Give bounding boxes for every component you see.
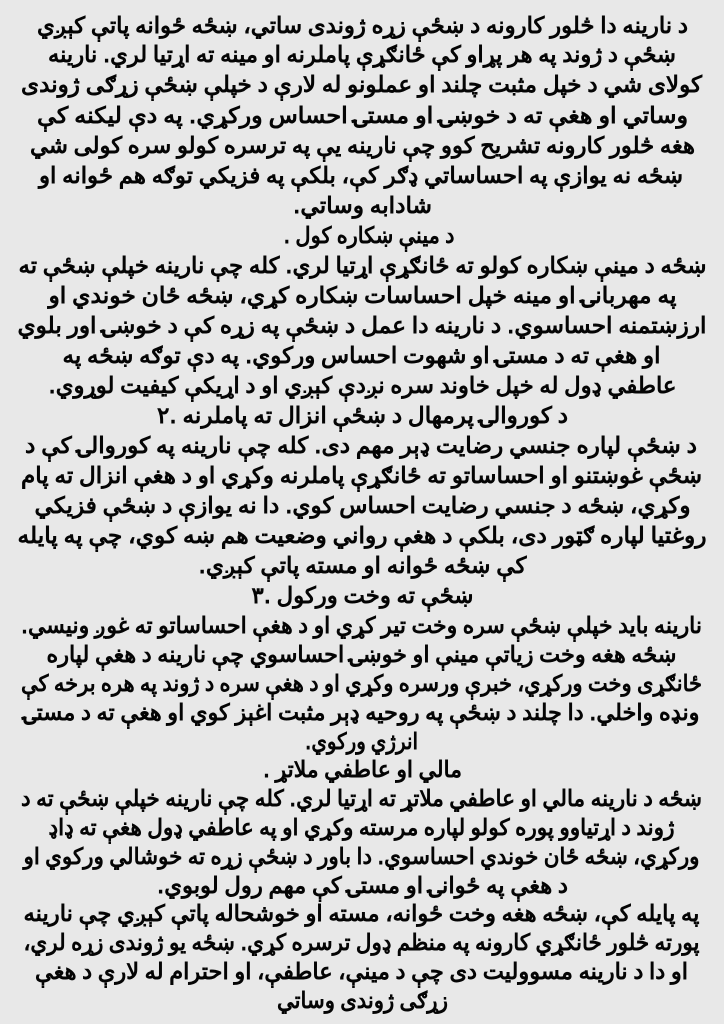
- text block: showing love: [18, 253, 706, 402]
- text block: introduction: کولای شي د خپل مثبت چلند او عملونو له لارې د خپلې ښځې زړګی ژوندی: [21, 72, 702, 101]
- text block: introduction: د نارینه دا څلور کارونه د ښځې زړه ژوندی ساتي، ښځه ځوانه پاتې کېږي: [37, 13, 688, 42]
- text block: showing love: او هغې ته د مستۍ او شهوت احساس ورکوي. په دې توګه ښځه په: [62, 343, 660, 372]
- text block: section 2: د ښځې لپاره جنسي رضایت ډېر مهم دی. کله چې نارینه په کوروالۍ کې د: [25, 433, 697, 462]
- text block: financial and emotional support: ژوند د اړتیاوو پوره کولو لپاره مرسته وکړي او په عاطفي ډول هغې ته ډاډ: [48, 815, 674, 844]
- text block: introduction: ښځې د ژوند په هر پړاو کې ځانګړې پاملرنه او مینه ته اړتیا لري. نارینه: [48, 42, 676, 71]
- text block: showing love: ارزښتمنه احساسوي. د نارینه دا عمل د ښځې په زړه کې د خوښۍ اور بلوي: [18, 313, 706, 342]
- text block: introduction: وساتي او هغې ته د خوښۍ او مستۍ احساس ورکړي. په دې لیکنه کې: [37, 103, 688, 132]
- text block: financial and emotional support: [21, 786, 702, 902]
- text block: showing love: عاطفي ډول له خپل خاوند سره نږدې کېږي او د اړیکې کیفیت لوړوي.: [48, 373, 677, 402]
- heading: section 2: د کوروالۍ پرمهال د ښځې انزال ته پاملرنه .۲: [157, 403, 568, 432]
- text block: section 3: انرژي ورکوي.: [305, 729, 418, 755]
- heading: section 3: ښځې ته وخت ورکول .۳: [252, 583, 474, 612]
- text block: section 2: روغتیا لپاره ګټور دی، بلکې د هغې رواني وضعیت هم ښه کوي، چې په پایله: [18, 523, 706, 552]
- text block: showing love: په مهربانۍ او مینه خپل احساسات ښکاره کړي، ښځه ځان خوندي او: [47, 283, 676, 309]
- text block: introduction: شادابه وساتي.: [293, 193, 432, 219]
- heading: showing love: د مینې ښکاره کول .: [284, 223, 454, 252]
- text block: showing love: ښځه د مینې ښکاره کولو ته ځانګړې اړتیا لري. کله چې نارینه خپلې ښځې ته: [18, 253, 706, 282]
- text block: section 3: [21, 613, 702, 755]
- text block: section 3: ونډه واخلي. دا چلند د ښځې په روحیه ډېر مثبت اغېز کوي او هغې ته د مستۍ: [22, 700, 700, 729]
- text block: introduction: هغه څلور کارونه تشریح کوو چې نارینه یې په ترسره کولو سره کولی شي: [30, 133, 695, 162]
- text block: conclusion: [24, 901, 700, 1014]
- text block: financial and emotional support: د هغې په ځوانۍ او مستۍ کې مهم رول لوبوي.: [157, 873, 568, 902]
- text block: conclusion: او دا د نارینه مسوولیت دی چې د مینې، عاطفې، او احترام له لارې د هغې: [35, 959, 688, 988]
- text block: section 3: ښځه هغه وخت زیاتې مینې او خوښۍ احساسوي چې نارینه د هغې لپاره: [46, 642, 676, 671]
- text block: financial and emotional support: ښځه د نارینه مالي او عاطفي ملاتړ ته اړتیا لري. کله چې نارینه خپلې ښځې ته د: [21, 786, 702, 815]
- text block: conclusion: زړګی ژوندی وساتي: [277, 988, 448, 1014]
- text block: financial and emotional support: ورکړي، ښځه ځان خوندي احساسوي. دا باور د ښځې زړه ته خوشالي ورکوي او: [23, 844, 700, 873]
- text block: section 2: [18, 433, 706, 582]
- text block: section 3: نارینه باید خپلې ښځې سره وخت تیر کړي او د هغې احساساتو ته غوږ ونیسي.: [21, 613, 702, 642]
- text block: section 2: کې ښځه ځوانه او مسته پاتې کېږي.: [198, 553, 527, 582]
- heading: financial and emotional support: مالي او عاطفي ملاتړ .: [263, 757, 462, 783]
- text block: conclusion: پورته څلور ځانګړي کارونه په منظم ډول ترسره کړي. ښځه یو ژوندی زړه لري،: [24, 930, 700, 956]
- text block: introduction: [21, 13, 702, 219]
- text block: introduction: ښځه نه یوازې په احساساتي ډګر کې، بلکې په فزیکي توګه هم ځوانه او: [38, 163, 683, 192]
- text block: section 2: ښځې غوښتنو او احساساتو ته ځانګړې پاملرنه وکړي او د هغې انزال ته پام: [21, 463, 702, 492]
- text block: section 2: وکړي، ښځه د جنسي رضایت احساس کوي. دا نه یوازې د ښځې فزیکي: [34, 493, 690, 522]
- text block: conclusion: په پایله کې، ښځه هغه وخت ځوانه، مسته او خوشحاله پاتې کېږي چې نارینه: [24, 901, 700, 930]
